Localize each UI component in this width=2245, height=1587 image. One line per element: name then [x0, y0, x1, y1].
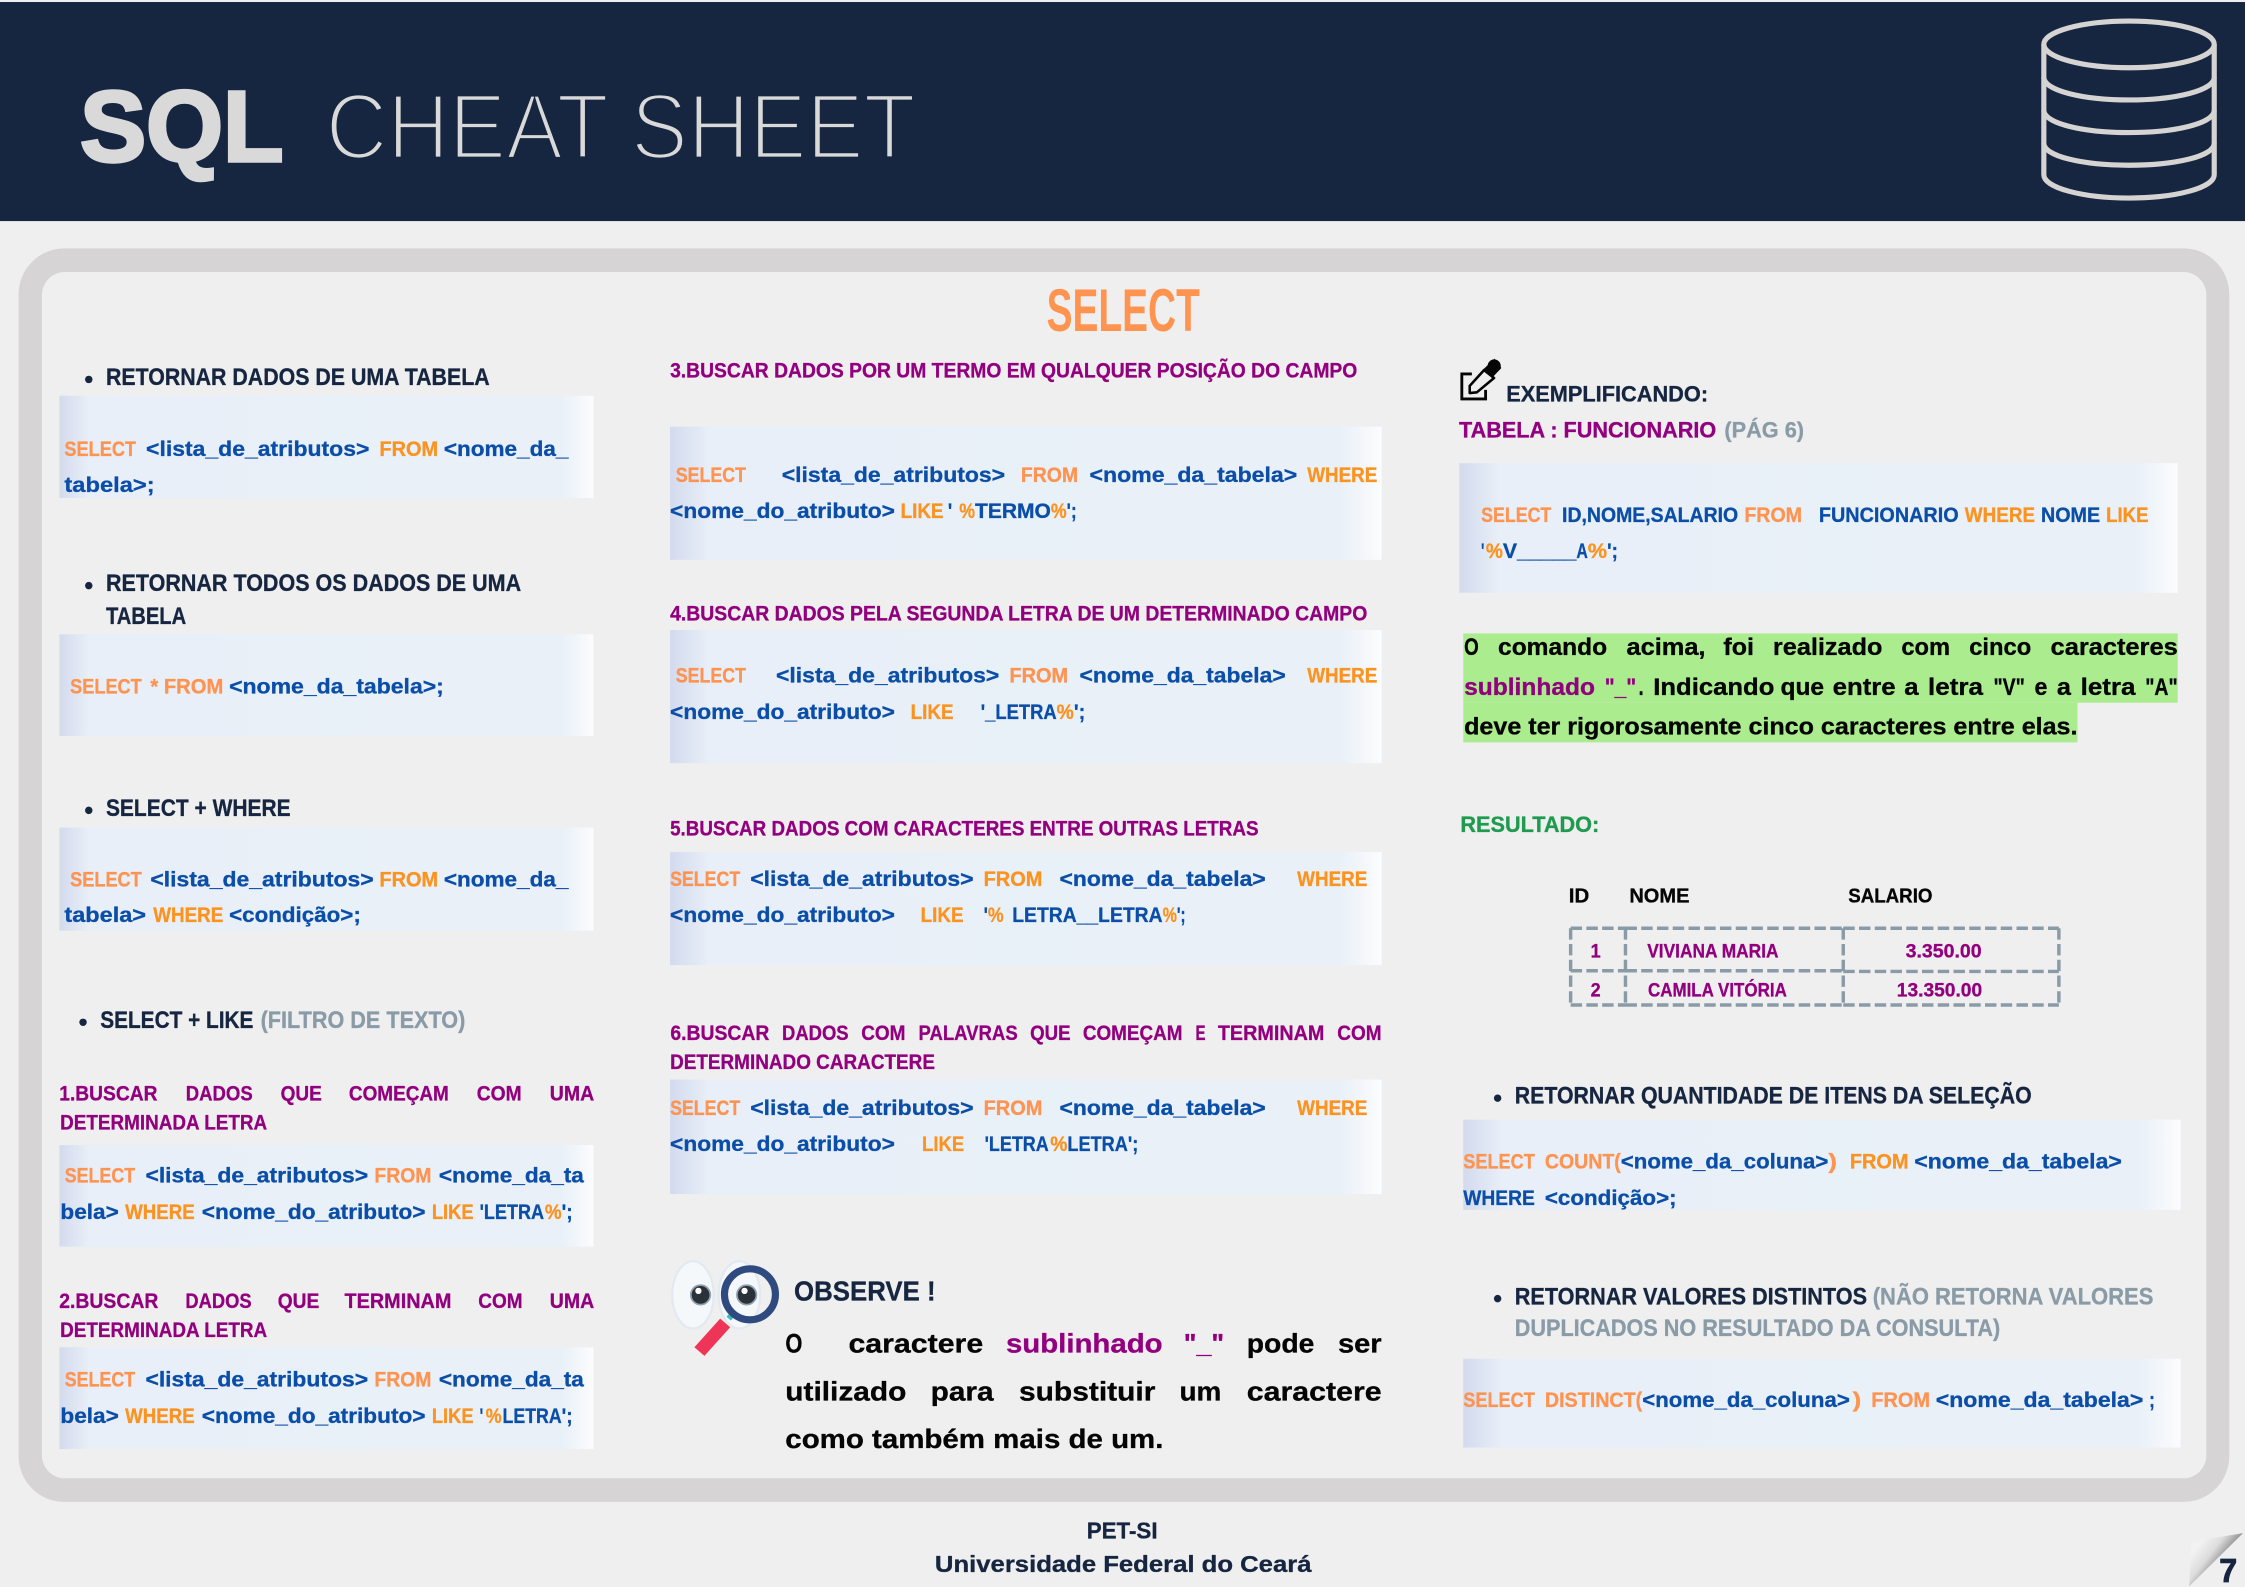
- block: segunda letra: [670, 603, 1382, 763]
- heading: select + like: [79, 1008, 465, 1034]
- callout: observe: um: [1179, 1377, 1221, 1407]
- block: like 1: %: [545, 1201, 562, 1224]
- block: entre letras: LIKE: [921, 904, 964, 927]
- block: entre letras: <nome_do_atributo>: [670, 904, 895, 927]
- block: buscar termo: WHERE: [1307, 464, 1377, 487]
- block: select + where: WHERE: [153, 904, 223, 927]
- block: count: COUNT(: [1545, 1150, 1622, 1173]
- block: segunda letra: ';: [1074, 701, 1085, 724]
- block: count: [1463, 1081, 2181, 1210]
- block: select + where: SELECT + WHERE: [106, 796, 291, 822]
- block: like 1: LIKE: [432, 1201, 474, 1224]
- footer: PET-SI: [1087, 1517, 1158, 1543]
- highlighted note: foi: [1723, 635, 1754, 661]
- heading: select + like: (FILTRO DE TEXTO): [261, 1008, 465, 1034]
- heading: select + like: SELECT + LIKE: [100, 1008, 253, 1034]
- block: count: ): [1828, 1150, 1837, 1173]
- block: buscar termo: %: [959, 500, 975, 523]
- block: distinct: DISTINCT(: [1545, 1389, 1643, 1412]
- block: segunda letra: SELECT: [676, 665, 746, 688]
- block: like 1: DETERMINADA LETRA: [60, 1112, 267, 1135]
- block: retornar dados: <nome_da_: [444, 438, 569, 461]
- highlighted note: caracteres: [2051, 635, 2178, 661]
- block: select + where: <lista_de_atributos>: [150, 868, 374, 891]
- block: like 2: TERMINAM: [344, 1290, 451, 1313]
- callout: observe: O: [785, 1328, 802, 1358]
- title: CHEAT SHEET: [326, 75, 916, 179]
- block: buscar termo: FROM: [1021, 464, 1078, 487]
- block: retornar todos: TABELA: [106, 604, 186, 630]
- block: like 1: WHERE: [125, 1201, 195, 1224]
- block: retornar dados: [59, 365, 593, 498]
- block: like 1: ';: [562, 1201, 573, 1224]
- header band: [0, 2, 2245, 221]
- block: buscar termo: 3.BUSCAR DADOS POR UM TERMO EM QUALQUER POSIÇÃO DO CAMPO: [670, 358, 1357, 383]
- block: comecam e terminam: <nome_do_atributo>: [670, 1133, 895, 1156]
- block: like 2: FROM: [374, 1369, 431, 1392]
- block: buscar termo: ': [948, 500, 952, 523]
- block: entre letras: <nome_da_tabela>: [1060, 868, 1266, 891]
- block: entre letras: %: [1163, 904, 1177, 927]
- block: entre letras: SELECT: [670, 868, 740, 891]
- block: retornar dados: RETORNAR DADOS DE UMA TABELA: [106, 365, 490, 391]
- highlighted note: [1463, 633, 2178, 742]
- block: comecam e terminam: TERMINAM: [1218, 1022, 1324, 1045]
- block: like 1: COMEÇAM: [349, 1083, 449, 1106]
- block: comecam e terminam: [670, 1022, 1382, 1194]
- heading: exemplificando: EXEMPLIFICANDO:: [1506, 381, 1708, 406]
- highlighted note: "A": [2145, 675, 2178, 701]
- block: like 1: 'LETRA: [480, 1201, 544, 1224]
- block: like 2: <nome_do_atributo>: [202, 1405, 426, 1428]
- block: comecam e terminam: LIKE: [922, 1133, 964, 1156]
- block: like 1: <nome_do_atributo>: [202, 1201, 426, 1224]
- block: like 2: %: [486, 1405, 502, 1428]
- code box: exemplo: %: [1588, 540, 1607, 563]
- callout: observe: OBSERVE !: [794, 1276, 936, 1307]
- block: comecam e terminam: %: [1050, 1133, 1068, 1156]
- block: distinct: ): [1853, 1389, 1861, 1412]
- block: segunda letra: LIKE: [911, 701, 954, 724]
- icon: eyes and magnifying glass: [672, 1261, 775, 1356]
- block: entre letras: 5.BUSCAR DADOS COM CARACTERES ENTRE OUTRAS LETRAS: [670, 818, 1259, 841]
- block: like 2: LETRA: [503, 1405, 562, 1428]
- block: count: <condição>;: [1545, 1187, 1677, 1210]
- block: like 2: bela>: [60, 1405, 119, 1428]
- block: like 2: WHERE: [125, 1405, 195, 1428]
- highlighted note: a: [2057, 675, 2072, 701]
- block: buscar termo: <lista_de_atributos>: [782, 464, 1005, 487]
- icon: database: [2044, 21, 2214, 198]
- callout: observe: como também mais de um.: [785, 1424, 1163, 1454]
- block: buscar termo: LIKE: [901, 500, 944, 523]
- code box: exemplo: [1459, 463, 2178, 593]
- block: like 2: LIKE: [432, 1405, 474, 1428]
- result table: 2: [1591, 981, 1601, 1002]
- block: comecam e terminam: LETRA';: [1067, 1133, 1138, 1156]
- title: [80, 71, 916, 183]
- callout: observe: utilizado: [785, 1377, 906, 1407]
- block: select + where: FROM: [379, 868, 438, 891]
- block: select + where: [59, 796, 593, 931]
- block: like 2: <lista_de_atributos>: [145, 1369, 368, 1392]
- block: comecam e terminam: COM: [861, 1022, 905, 1045]
- block: distinct: DUPLICADOS NO RESULTADO DA CONSULTA): [1515, 1316, 2000, 1342]
- block: retornar todos: RETORNAR TODOS OS DADOS DE UMA: [106, 571, 521, 597]
- block: segunda letra: WHERE: [1307, 665, 1377, 688]
- block: like 2: QUE: [278, 1290, 319, 1313]
- block: count: SELECT: [1463, 1150, 1535, 1173]
- block: distinct: SELECT: [1463, 1389, 1535, 1412]
- result table: CAMILA VITÓRIA: [1648, 978, 1787, 1002]
- block: like 1: DADOS: [186, 1083, 253, 1106]
- highlighted note: entre: [1833, 675, 1896, 701]
- heading: select: SELECT: [1047, 277, 1200, 344]
- highlighted note: "_": [1605, 675, 1636, 701]
- callout: observe: caractere: [1247, 1377, 1382, 1407]
- code box: exemplo: FROM: [1744, 504, 1802, 527]
- callout: observe: "_": [1184, 1328, 1224, 1358]
- icon: edit with dropper: [1462, 359, 1501, 399]
- block: entre letras: %: [988, 904, 1004, 927]
- highlighted note: acima,: [1626, 635, 1706, 661]
- highlighted note: Indicando: [1653, 675, 1774, 701]
- block: count: WHERE: [1463, 1187, 1535, 1210]
- block: buscar termo: [670, 358, 1382, 560]
- callout: observe: pode: [1247, 1328, 1314, 1358]
- block: segunda letra: <nome_da_tabela>: [1080, 665, 1286, 688]
- result table: 1: [1591, 941, 1601, 962]
- block: comecam e terminam: WHERE: [1297, 1097, 1367, 1120]
- block: select + where: SELECT: [70, 868, 142, 891]
- block: distinct: <nome_da_tabela>: [1936, 1389, 2143, 1412]
- callout: observe: ser: [1338, 1328, 1382, 1358]
- highlighted note: "V": [1993, 675, 2025, 701]
- code box: exemplo: FUNCIONARIO: [1819, 504, 1959, 527]
- block: count: FROM: [1850, 1150, 1909, 1173]
- block: select + where: <condição>;: [229, 904, 361, 927]
- block: buscar termo: SELECT: [676, 464, 746, 487]
- block: entre letras: WHERE: [1297, 868, 1367, 891]
- block: buscar termo: <nome_da_tabela>: [1090, 464, 1297, 487]
- result table: ID: [1569, 886, 1589, 908]
- block: segunda letra: <lista_de_atributos>: [776, 665, 999, 688]
- block: comecam e terminam: <nome_da_tabela>: [1060, 1097, 1266, 1120]
- block: like 1: SELECT: [65, 1165, 135, 1188]
- code box: exemplo: SELECT: [1481, 504, 1551, 527]
- heading: exemplificando: TABELA : FUNCIONARIO: [1459, 417, 1716, 442]
- block: like 2: DADOS: [185, 1290, 252, 1313]
- block: like 1: <lista_de_atributos>: [145, 1165, 368, 1188]
- code box: exemplo: LIKE: [2106, 504, 2148, 527]
- block: segunda letra: %: [1057, 701, 1074, 724]
- block: comecam e terminam: PALAVRAS: [918, 1022, 1018, 1045]
- block: like 1: 1.BUSCAR: [59, 1083, 157, 1106]
- block: retornar dados: FROM: [379, 438, 438, 461]
- callout: observe: substituir: [1019, 1377, 1155, 1407]
- block: count: RETORNAR QUANTIDADE DE ITENS DA SELEÇÃO: [1515, 1081, 2032, 1109]
- block: like 2: SELECT: [65, 1369, 135, 1392]
- block: entre letras: LETRA__LETRA: [1012, 904, 1163, 927]
- highlighted note: cinco: [1969, 635, 2031, 661]
- heading: exemplificando: [1459, 381, 1804, 442]
- block: entre letras: FROM: [984, 868, 1042, 891]
- code box: exemplo: WHERE: [1965, 504, 2035, 527]
- block: distinct: ;: [2149, 1389, 2155, 1412]
- code box: exemplo: NOME: [2041, 504, 2100, 527]
- block: like 2: COM: [478, 1290, 523, 1313]
- highlighted note: sublinhado: [1464, 675, 1595, 701]
- block: count: <nome_da_coluna>: [1621, 1150, 1828, 1173]
- block: entre letras: ': [984, 904, 988, 927]
- block: distinct: FROM: [1871, 1389, 1930, 1412]
- block: like 1: <nome_da_ta: [439, 1165, 584, 1188]
- highlighted note: deve ter rigorosamente cinco caracteres entre elas.: [1464, 715, 2077, 741]
- block: retornar todos: SELECT: [70, 676, 142, 699]
- highlighted note: letra: [2081, 675, 2136, 701]
- block: buscar termo: TERMO: [975, 500, 1051, 523]
- footer: [935, 1517, 1312, 1577]
- callout: observe: caractere: [848, 1328, 983, 1358]
- block: entre letras: ';: [1177, 904, 1185, 927]
- block: comecam e terminam: 6.BUSCAR: [670, 1022, 769, 1045]
- block: like 1: COM: [477, 1083, 522, 1106]
- block: segunda letra: <nome_do_atributo>: [670, 701, 895, 724]
- code box: exemplo: ';: [1607, 540, 1618, 563]
- block: comecam e terminam: DETERMINADO CARACTERE: [670, 1051, 935, 1074]
- callout: observe: [785, 1276, 1382, 1454]
- highlighted note: letra: [1928, 675, 1984, 701]
- block: like 1: QUE: [281, 1083, 322, 1106]
- block: buscar termo: ';: [1067, 500, 1077, 523]
- block: like 1: [59, 1083, 594, 1247]
- block: distinct: RETORNAR VALORES DISTINTOS: [1515, 1284, 1867, 1310]
- block: distinct: <nome_da_coluna>: [1642, 1389, 1850, 1412]
- block: like 1: UMA: [550, 1083, 594, 1106]
- block: retornar dados: SELECT: [64, 438, 136, 461]
- result table: 13.350.00: [1897, 981, 1982, 1002]
- block: like 2: [59, 1290, 594, 1449]
- result table: [1569, 886, 2059, 1005]
- block: segunda letra: '_LETRA: [981, 701, 1057, 724]
- block: like 2: ': [480, 1405, 483, 1428]
- block: like 2: <nome_da_ta: [439, 1369, 584, 1392]
- result table: VIVIANA MARIA: [1647, 941, 1779, 962]
- callout: observe: para: [931, 1377, 994, 1407]
- block: comecam e terminam: E: [1196, 1022, 1206, 1045]
- block: retornar todos: * FROM: [150, 676, 223, 699]
- result table: NOME: [1629, 886, 1689, 908]
- highlighted note: que: [1781, 675, 1824, 701]
- highlighted note: e: [2035, 675, 2047, 701]
- highlighted note: realizado: [1773, 635, 1882, 661]
- highlighted note: O: [1464, 635, 1479, 661]
- code box: exemplo: ID,NOME,SALARIO: [1562, 504, 1738, 527]
- title: SQL: [80, 71, 283, 183]
- block: comecam e terminam: COMEÇAM: [1083, 1022, 1182, 1045]
- block: retornar dados: <lista_de_atributos>: [146, 438, 369, 461]
- block: like 2: DETERMINADA LETRA: [60, 1319, 267, 1342]
- block: distinct: [1463, 1282, 2181, 1448]
- code box: exemplo: %: [1486, 540, 1503, 563]
- block: segunda letra: FROM: [1009, 665, 1068, 688]
- footer: Universidade Federal do Ceará: [935, 1551, 1312, 1577]
- block: buscar termo: <nome_do_atributo>: [670, 500, 895, 523]
- block: like 2: 2.BUSCAR: [59, 1290, 158, 1313]
- block: like 1: FROM: [374, 1165, 431, 1188]
- callout: observe: sublinhado: [1006, 1328, 1163, 1358]
- block: retornar dados: tabela>;: [64, 474, 155, 497]
- code box: exemplo: ': [1481, 540, 1484, 563]
- block: like 2: ';: [562, 1405, 573, 1428]
- page curl and number: [2189, 1533, 2243, 1587]
- block: comecam e terminam: FROM: [984, 1097, 1042, 1120]
- block: comecam e terminam: SELECT: [670, 1097, 740, 1120]
- block: entre letras: <lista_de_atributos>: [750, 868, 974, 891]
- block: buscar termo: %: [1051, 500, 1067, 523]
- block: comecam e terminam: COM: [1337, 1022, 1382, 1045]
- highlighted note: a: [1904, 675, 1919, 701]
- block: select + where: tabela>: [64, 904, 146, 927]
- result table: 3.350.00: [1906, 941, 1982, 962]
- block: comecam e terminam: 'LETRA: [985, 1133, 1049, 1156]
- block: segunda letra: 4.BUSCAR DADOS PELA SEGUNDA LETRA DE UM DETERMINADO CAMPO: [670, 603, 1367, 626]
- highlighted note: comando: [1498, 635, 1607, 661]
- block: retornar todos: [59, 571, 593, 736]
- heading: exemplificando: (PÁG 6): [1724, 417, 1804, 442]
- code box: exemplo: V_____: [1503, 540, 1577, 563]
- result table: SALARIO: [1848, 886, 1932, 908]
- heading: resultado: RESULTADO:: [1460, 812, 1599, 837]
- block: comecam e terminam: QUE: [1030, 1022, 1071, 1045]
- block: comecam e terminam: <lista_de_atributos>: [750, 1097, 974, 1120]
- block: like 2: UMA: [550, 1290, 594, 1313]
- block: select + where: <nome_da_: [444, 868, 569, 891]
- highlighted note: com: [1901, 635, 1950, 661]
- block: like 1: bela>: [60, 1201, 119, 1224]
- block: retornar todos: <nome_da_tabela>;: [229, 676, 444, 699]
- block: count: <nome_da_tabela>: [1914, 1150, 2122, 1173]
- block: distinct: (NÃO RETORNA VALORES: [1873, 1282, 2153, 1310]
- block: entre letras: [670, 818, 1382, 965]
- code box: exemplo: A: [1576, 540, 1588, 563]
- block: comecam e terminam: DADOS: [782, 1022, 849, 1045]
- highlighted note: .: [1639, 675, 1644, 701]
